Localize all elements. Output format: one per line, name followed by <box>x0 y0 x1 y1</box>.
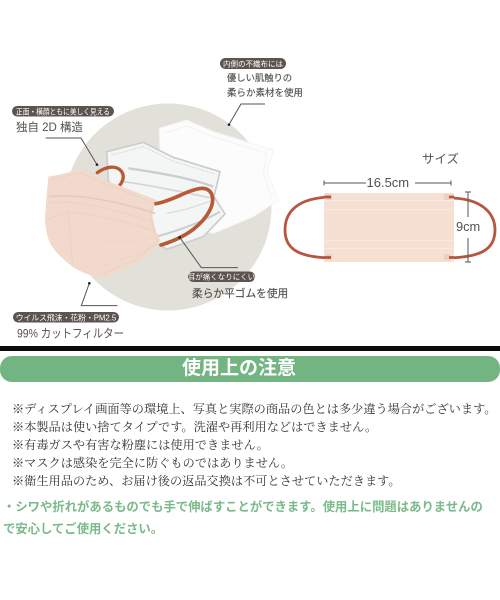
callout: filter: ウイルス飛沫・花粉・PM2.5 <box>16 313 117 323</box>
callout: inner fabric: 優しい肌触りの <box>227 72 292 83</box>
width dimension: 16.5cm <box>366 175 409 190</box>
callout: 2D structure <box>12 106 114 134</box>
callout: 2D structure: 正面・横顔ともに美しく見える <box>16 106 110 116</box>
icon: ear loop behind mask <box>97 167 123 186</box>
callout: 2D structure: 独自 2D 構造 <box>16 120 83 134</box>
icon: grey middle mask <box>107 142 225 249</box>
arrow: ear loop leader <box>178 236 238 268</box>
callout: soft flat elastic <box>188 272 288 300</box>
arrow: filter leader <box>81 282 117 306</box>
size diagram <box>285 151 495 262</box>
width dimension <box>324 175 451 190</box>
callout: inner fabric: 柔らか素材を使用 <box>227 87 303 99</box>
arrow: 2D structure leader <box>46 138 98 166</box>
divider top edge <box>0 345 330 346</box>
background circle <box>64 104 272 310</box>
text block: notes: ※本製品は使い捨てタイプです。洗濯や再利用などはできません。 <box>12 420 377 434</box>
text block: notes: ※マスクは感染を完全に防ぐものではありません。 <box>12 456 293 470</box>
icon: flat mask body <box>324 193 454 262</box>
icon: white back mask <box>159 120 279 233</box>
text block: green note: で安心してご使用ください。 <box>3 522 163 536</box>
text block: notes: ※ディスプレイ画面等の環境上、写真と実際の商品の色とは多少違う場合がございます。 <box>12 402 496 416</box>
height dimension <box>456 192 480 262</box>
text block: green note <box>3 500 483 536</box>
heading: size: サイズ <box>422 151 459 166</box>
callout: filter <box>13 312 124 340</box>
text block: green note: ・シワや折れがあるものでも手で伸ばすことができます。使用上に問題はありませんの <box>3 500 483 514</box>
heading bar: usage notes: 使用上の注意 <box>182 358 296 379</box>
arrow: inner fabric leader <box>228 104 265 126</box>
icon: pink front mask <box>45 169 161 279</box>
callout: soft flat elastic: 耳が痛くなりにくい <box>188 272 255 282</box>
illustration: three masks <box>45 104 279 306</box>
product illustration panel <box>12 58 496 340</box>
callout: inner fabric <box>220 58 303 99</box>
text block: notes <box>12 402 496 488</box>
callout: filter: 99% カットフィルター <box>17 326 124 340</box>
icon: front ear loop <box>156 188 213 245</box>
text block: notes: ※有毒ガスや有害な粉塵には使用できません。 <box>12 438 269 452</box>
callout: inner fabric: 内側の不織布には <box>223 59 283 69</box>
callout: soft flat elastic: 柔らか平ゴムを使用 <box>192 287 288 300</box>
text block: notes: ※衛生用品のため、お届け後の返品交換は不可とさせていただきます。 <box>12 474 401 488</box>
icon: flat mask ear loops <box>285 197 495 258</box>
heading bar: usage notes <box>0 356 500 382</box>
height dimension: 9cm <box>456 219 480 234</box>
